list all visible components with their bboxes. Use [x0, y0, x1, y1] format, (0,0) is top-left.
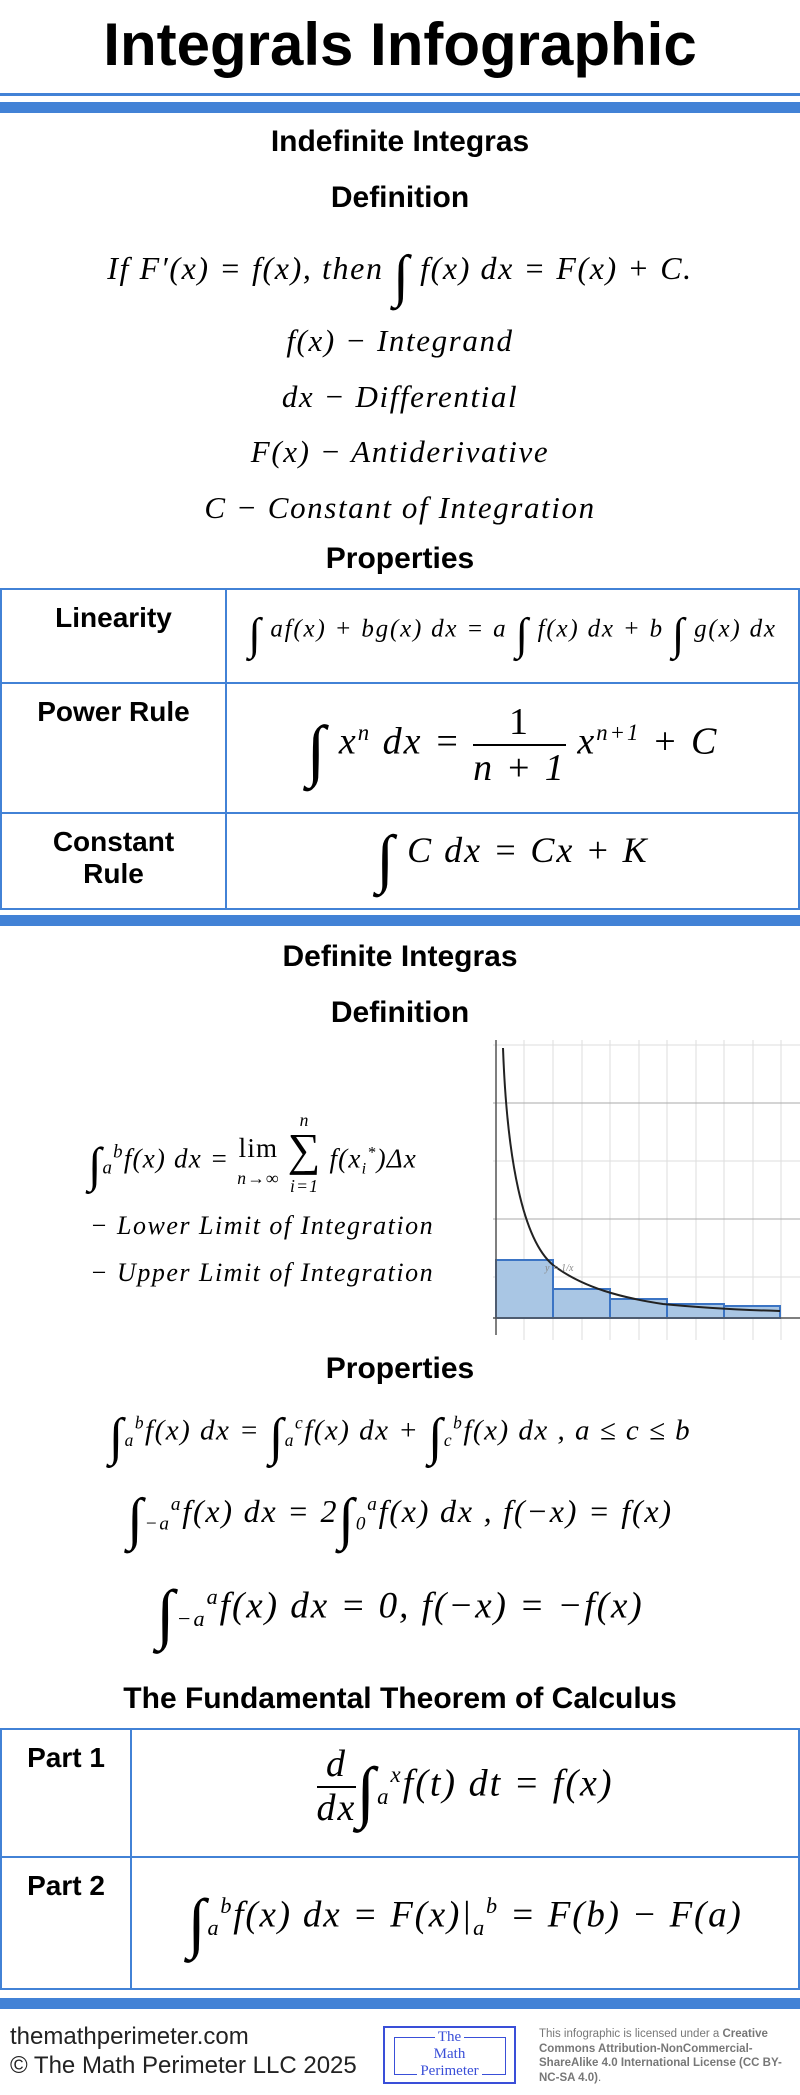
footer: website: [10, 2023, 357, 2079]
text block: terms: [204, 323, 596, 525]
text block: limits: − Upper Limit of Integration: [90, 1258, 434, 1287]
footer: website: themathperimeter.com: [10, 2023, 249, 2050]
table: indefinite properties: ∫ af(x) + bg(x) dx = a ∫ f(x) dx + b ∫ g(x) dx: [248, 609, 777, 659]
formulas: definite properties: ∫abf(x) dx = ∫acf(x) dx + ∫cbf(x) dx , a ≤ c ≤ b: [109, 1408, 691, 1466]
table: indefinite properties: n + 1: [473, 747, 566, 789]
table: indefinite properties: ∫ C dx = Cx + K: [376, 823, 649, 895]
table: FTC: d: [326, 1743, 347, 1785]
text block: terms: C − Constant of Integration: [204, 490, 596, 525]
table: FTC: ∫axf(t) dt = f(x): [356, 1754, 614, 1830]
table: FTC: dx: [316, 1787, 356, 1829]
formulas: definite properties: ∫−aaf(x) dx = 0, f(−x) = −f(x): [156, 1578, 644, 1651]
text block: limits: − Lower Limit of Integration: [90, 1211, 434, 1240]
formulas: definite properties: [106, 1408, 691, 1654]
text block: terms: dx − Differential: [282, 379, 518, 414]
heading: definition: Definition: [331, 181, 469, 214]
table: indefinite properties: Rule: [83, 858, 144, 889]
heading: definite integrals: Definite Integras: [282, 940, 518, 973]
text block: terms: F(x) − Antiderivative: [251, 434, 549, 469]
heading: definition 2: Definition: [331, 996, 469, 1029]
license text: This infographic is licensed under a Creative Commons Attribution-NonCommercial-ShareAlike 4.0 International License (CC BY-NC-SA 4.0).: [539, 2028, 782, 2084]
formula: riemann sum: i=1: [290, 1176, 319, 1196]
text block: limits: [90, 1211, 434, 1287]
table: indefinite properties: 1: [509, 701, 530, 743]
heading: properties 2: Properties: [326, 1352, 474, 1385]
text block: terms: f(x) − Integrand: [286, 323, 514, 358]
logo: Math: [434, 2046, 465, 2062]
heading: fundamental theorem: The Fundamental Theorem of Calculus: [123, 1682, 677, 1715]
logo: Perimeter: [420, 2063, 479, 2079]
table: indefinite properties: ∫ xn dx = xn+1 + C: [307, 712, 718, 788]
formulas: definite properties: ∫−aaf(x) dx = 2∫0af(x) dx , f(−x) = f(x): [127, 1488, 673, 1551]
formula: riemann sum: n: [300, 1110, 310, 1130]
title: Integrals Infographic: [103, 11, 697, 78]
footer: website: © The Math Perimeter LLC 2025: [10, 2052, 357, 2079]
formula: riemann sum: [86, 1110, 417, 1196]
heading: indefinite integrals: Indefinite Integras: [271, 125, 529, 158]
table: indefinite properties: Linearity: [55, 602, 172, 633]
table: FTC: Part 2: [27, 1870, 105, 1901]
formula: riemann sum: ∑: [288, 1124, 322, 1175]
logo: [383, 2026, 516, 2084]
logo: The: [438, 2029, 461, 2045]
heading: properties: Properties: [326, 542, 474, 575]
formula: riemann sum: ∫abf(x) dx = f(xi*)Δx: [88, 1138, 417, 1192]
table: FTC: [0, 1728, 800, 1990]
formula: riemann sum: n→∞: [237, 1168, 280, 1188]
table: indefinite properties: Constant: [53, 826, 174, 857]
table: indefinite properties: Power Rule: [37, 696, 190, 727]
table: FTC: ∫abf(x) dx = F(x)|ab = F(b) − F(a): [187, 1887, 743, 1960]
table: FTC: Part 1: [27, 1742, 105, 1773]
formula: definition: If F′(x) = f(x), then ∫ f(x) dx = F(x) + C.: [107, 245, 693, 308]
chart: riemann graph: y = 1/x: [544, 1263, 574, 1274]
chart: riemann graph: [493, 1040, 800, 1340]
table: indefinite properties: [0, 588, 800, 910]
formula: riemann sum: lim: [239, 1132, 278, 1162]
